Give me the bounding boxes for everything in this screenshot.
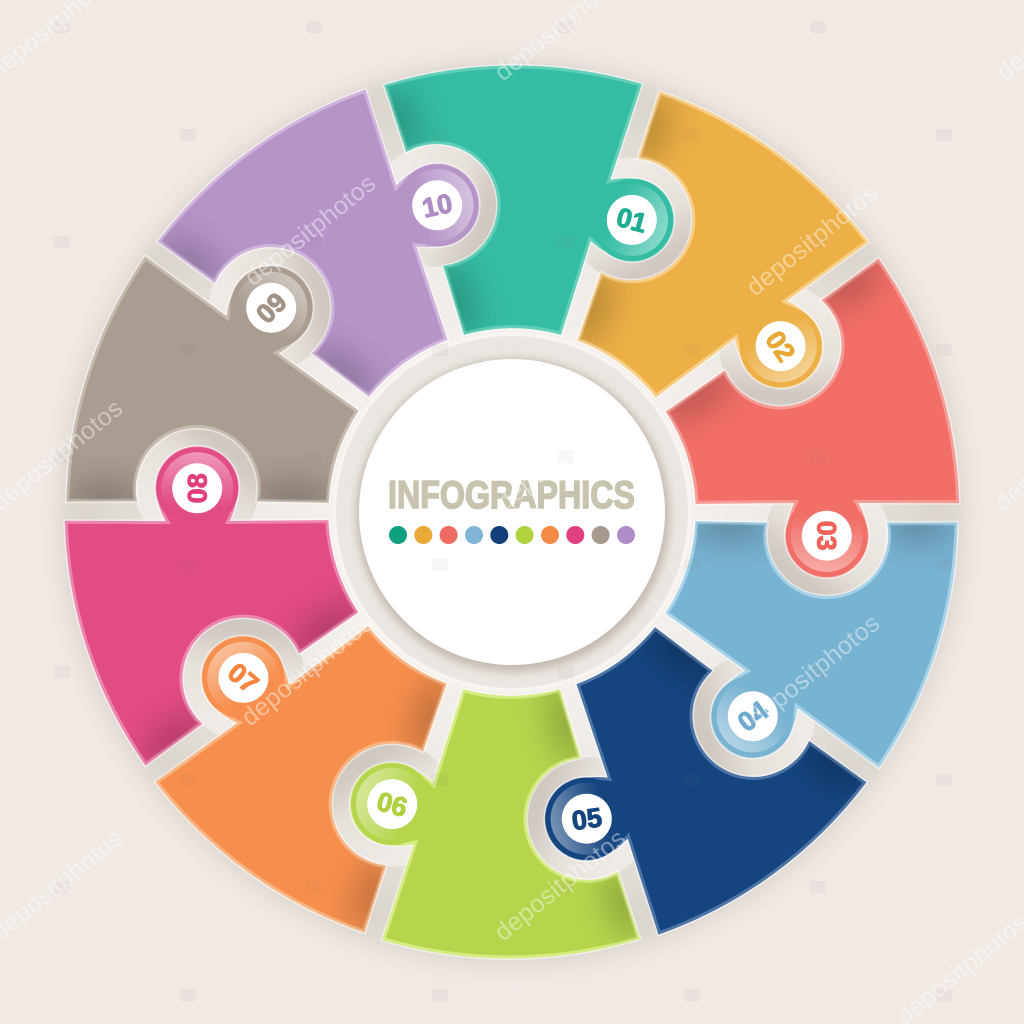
badge 10: 10 [419,188,455,224]
watermark text: depositphotos [743,609,885,732]
badge 04: 04 [732,696,774,738]
center hub [332,332,692,692]
watermark text: depositphotos [239,169,381,292]
badge 06: 06 [374,786,410,823]
panel: segment 03 coral [664,256,961,579]
badge 08 [172,463,222,513]
badge 03: 03 [811,521,841,551]
badge 08: 08 [183,473,213,503]
panel: segment 06 green [351,691,638,957]
panel: segment 08 pink [63,445,360,768]
badge 06 [367,779,417,829]
title: INFOGRAPHICS [388,474,635,517]
watermark text: depositphotos [489,824,631,947]
panel: segment 02 amber [576,90,870,399]
colour dots legend [389,526,635,544]
badge 05 [562,794,612,844]
badge 10 [412,180,462,230]
panel: segment 10 purple [156,88,481,398]
watermark text: depositphotos [491,394,633,517]
panel: segment 07 orange [154,625,448,934]
badge 02 [756,321,806,371]
badge 01: 01 [613,202,650,239]
badge 07: 07 [222,657,264,699]
badge 05: 05 [570,802,604,836]
disc base [56,58,968,970]
panel: segment 09 taupe [65,254,360,504]
watermark text: depositphotos [741,179,883,302]
badge 03 [802,511,852,561]
badge 02: 02 [759,326,801,367]
badge 09: 09 [250,287,293,329]
watermark text: depositphotos [236,609,378,732]
panel: segment 05 navy [543,626,868,936]
badge 01 [607,195,657,245]
panel: segment 01 teal [386,67,673,333]
panel: segment 04 light blue [664,520,959,770]
